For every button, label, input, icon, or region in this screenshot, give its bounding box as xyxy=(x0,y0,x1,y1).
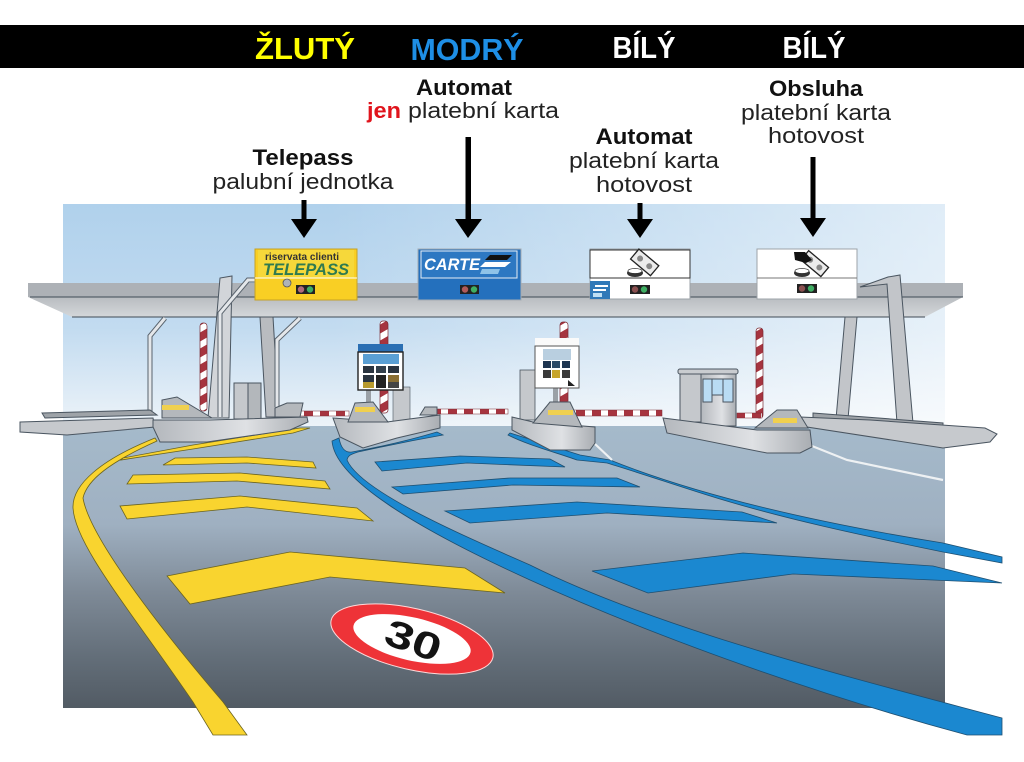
blue lane markings xyxy=(332,432,1002,735)
label: Automat card and cash xyxy=(569,124,720,197)
label: Telepass: Telepass xyxy=(252,145,354,170)
label: Obsluha: hotovost xyxy=(768,123,864,148)
sign: Telepass lane xyxy=(255,249,357,300)
heading: blue: MODRÝ xyxy=(410,32,524,67)
heading: white 1: BÍLÝ xyxy=(612,30,676,65)
yellow lane markings xyxy=(73,428,505,735)
canopy beam xyxy=(28,283,963,317)
ticket machine: blue panel xyxy=(358,344,410,422)
arrow: card only xyxy=(455,137,482,238)
sign: CARTE lane: CARTE xyxy=(424,255,481,274)
label: Automat card only xyxy=(366,75,560,123)
road surface xyxy=(63,426,945,708)
cabinet left xyxy=(234,383,261,419)
sign: CARTE lane xyxy=(418,249,521,300)
barriers xyxy=(293,409,762,418)
scene: toll plaza illustration xyxy=(20,204,1002,735)
label: Obsluha: platební karta xyxy=(741,100,892,125)
label: Telepass: palubní jednotka xyxy=(212,169,394,194)
arrow: staffed xyxy=(800,157,826,237)
right and left islands xyxy=(20,410,997,448)
staffed booth xyxy=(678,369,738,426)
striped poles xyxy=(200,321,763,418)
label: Automat card only: Automat xyxy=(416,75,513,100)
canopy supports xyxy=(208,275,913,423)
label: Automat card and cash: hotovost xyxy=(596,172,692,197)
sign: white automat lane xyxy=(590,249,690,299)
heading: yellow: ŽLUTÝ xyxy=(255,30,355,66)
label: Automat card and cash: platební karta xyxy=(569,148,720,173)
label: Automat card only: platební karta xyxy=(408,98,560,123)
sky xyxy=(63,204,945,429)
speed limit sign: 30: 30 xyxy=(379,610,447,670)
speed limit sign: 30 xyxy=(324,591,500,687)
ticket machine: white panel xyxy=(520,338,579,420)
sign: Telepass lane: riservata clienti xyxy=(265,252,339,263)
white lane lines xyxy=(595,444,943,480)
booth islands xyxy=(153,397,812,453)
header bar xyxy=(0,25,1024,68)
sign: Telepass lane: TELEPASS xyxy=(263,260,350,279)
label: Obsluha xyxy=(741,76,892,148)
label: Obsluha: Obsluha xyxy=(769,76,864,101)
label: Telepass xyxy=(212,145,394,194)
heading: white 2: BÍLÝ xyxy=(782,30,846,65)
arrow: Telepass xyxy=(291,200,317,238)
arrow: automat xyxy=(627,203,653,238)
conduit pipes xyxy=(150,280,300,417)
label: Automat card and cash: Automat xyxy=(596,124,693,149)
label: Automat card only: jen xyxy=(366,98,401,123)
sign: white staffed lane xyxy=(757,249,857,299)
